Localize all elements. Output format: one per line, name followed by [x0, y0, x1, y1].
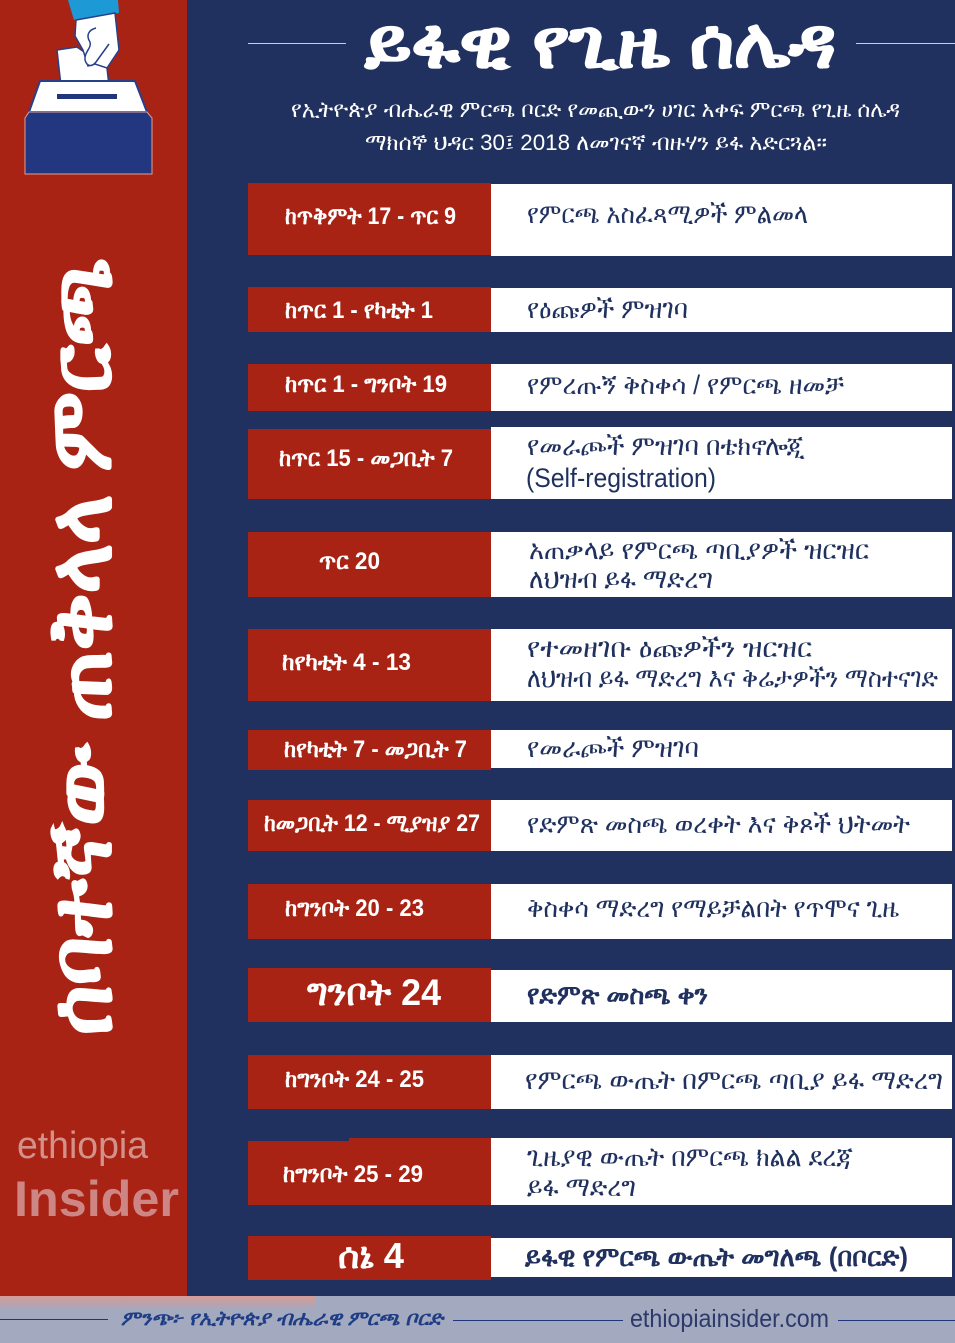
- logo: ethiopia Insider: ethiopia: [17, 1125, 149, 1167]
- row 1: ከጥቅምት 17 - ጥር 9: [285, 203, 456, 230]
- row 7: ከየካቲት 7 - መጋቢት 7: [284, 736, 467, 763]
- row 12: [248, 1138, 952, 1205]
- row 3: የምረጡኝ ቅስቀሳ / የምርጫ ዘመቻ: [527, 370, 844, 400]
- footer band: [0, 1296, 955, 1343]
- row 2: ከጥር 1 - የካቲት 1: [285, 297, 433, 324]
- row 6: ከየካቲት 4 - 13: [282, 649, 411, 676]
- subtitle text: የኢትዮጵያ ብሔራዊ ምርጫ ቦርድ የመጪውን ሀገር አቀፍ ምርጫ የጊዜ ሰሌዳ: [291, 97, 900, 122]
- row 4: (Self-registration): [526, 463, 716, 493]
- logo: ethiopia Insider: [14, 1125, 179, 1227]
- icon: ballot box with hand: [25, 0, 152, 174]
- row 11: የምርጫ ውጤት በምርጫ ጣቢያ ይፋ ማድረግ: [525, 1065, 943, 1095]
- row 9: ከግንቦት 20 - 23: [285, 895, 424, 922]
- row 3: [248, 364, 952, 411]
- row 5: አጠቃላይ የምርጫ ጣቢያዎች ዝርዝር: [529, 535, 869, 565]
- row 4: የመራጮች ምዝገባ በቴክኖሎጂ: [527, 431, 805, 461]
- row 5: ለህዝብ ይፋ ማድረግ: [529, 564, 713, 594]
- row 10: election day: የድምጽ መስጫ ቀን: [527, 980, 708, 1010]
- row 8: [248, 800, 952, 851]
- row 7: የመራጮች ምዝገባ: [527, 733, 699, 763]
- row 11: [248, 1055, 952, 1109]
- row 5: [248, 532, 952, 597]
- subtitle text: [291, 97, 900, 155]
- row 2: የዕጩዎች ምዝገባ: [527, 294, 688, 324]
- row 13: final results: ሰኔ 4: [338, 1235, 404, 1276]
- row 10: election day: ግንቦት 24: [307, 972, 441, 1013]
- row 1: የምርጫ አስፈጻሚዎች ምልመላ: [527, 199, 808, 229]
- source credit: ምንጭ፦ የኢትዮጵያ ብሔራዊ ምርጫ ቦርድ: [121, 1308, 445, 1330]
- row 1: [248, 183, 952, 256]
- row 13: final results: ይፋዊ የምርጫ ውጤት መግለጫ (በቦርድ): [524, 1242, 908, 1272]
- row 8: የድምጽ መስጫ ወረቀት እና ቅጾች ህትመት: [527, 809, 910, 839]
- row 9: ቅስቀሳ ማድረግ የማይቻልበት የጥሞና ጊዜ: [527, 893, 900, 923]
- subtitle text: ማክሰኞ ህዳር 30፤ 2018 ለመገናኛ ብዙሃን ይፋ አድርጓል።: [365, 130, 827, 155]
- row 4: [248, 427, 952, 499]
- row 3: ከጥር 1 - ግንቦት 19: [285, 371, 447, 398]
- row 12: ይፋ ማድረግ: [527, 1172, 636, 1202]
- website: ethiopiainsider.com: [630, 1305, 829, 1333]
- row 6: [248, 629, 952, 701]
- row 12: ጊዜያዊ ውጤት በምርጫ ክልል ደረጃ: [527, 1142, 853, 1172]
- vertical heading: ሰባተኛው ጠቅላላ ምርጫ: [32, 258, 129, 1035]
- row 12: ከግንቦት 25 - 29: [283, 1161, 423, 1188]
- row 4: ከጥር 15 - መጋቢት 7: [279, 445, 453, 472]
- row 2: [248, 287, 952, 332]
- row 13: final results: [248, 1235, 952, 1280]
- row 10: election day: [248, 968, 952, 1022]
- logo: ethiopia Insider: Insider: [14, 1171, 179, 1227]
- row 6: የተመዘገቡ ዕጩዎችን ዝርዝር: [527, 633, 812, 663]
- row 8: ከመጋቢት 12 - ሚያዝያ 27: [264, 810, 480, 837]
- title: ይፋዊ የጊዜ ሰሌዳ: [364, 6, 836, 82]
- row 7: [248, 730, 952, 770]
- panel: left sidebar: [0, 0, 187, 1296]
- row 11: ከግንቦት 24 - 25: [285, 1066, 424, 1093]
- row 9: [248, 884, 952, 939]
- row 5: ጥር 20: [319, 548, 380, 575]
